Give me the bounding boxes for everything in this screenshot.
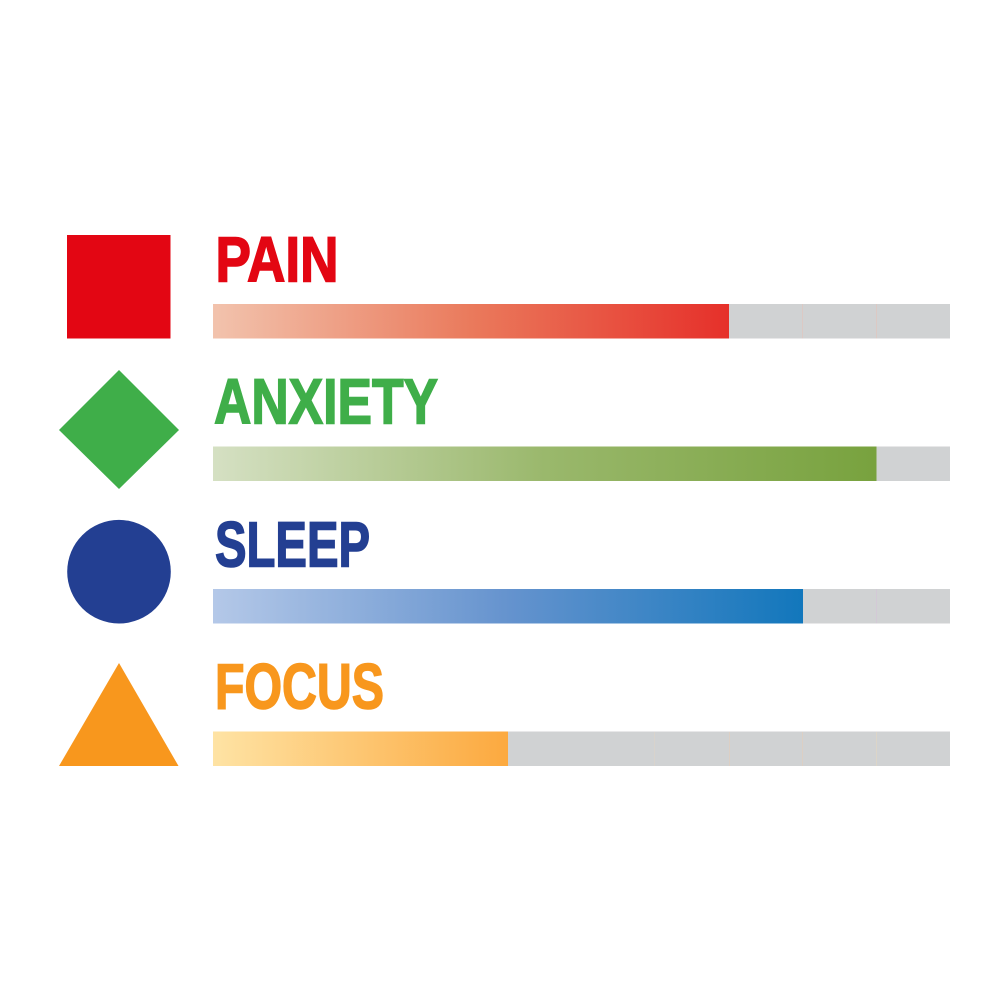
row: focus bbox=[59, 650, 950, 766]
icon: blue circle bbox=[67, 520, 171, 624]
bar: anxiety bbox=[213, 446, 950, 481]
heading: anxiety: ANXIETY bbox=[214, 366, 438, 438]
bar: focus bbox=[213, 732, 950, 766]
icon: orange triangle bbox=[59, 663, 178, 766]
heading: sleep: SLEEP bbox=[215, 508, 370, 580]
icon: green diamond bbox=[59, 370, 179, 489]
heading: focus: FOCUS bbox=[215, 650, 384, 722]
row: pain bbox=[67, 224, 950, 338]
bar: sleep bbox=[213, 589, 950, 624]
heading: pain: PAIN bbox=[216, 224, 338, 296]
row: sleep bbox=[67, 508, 950, 624]
bar: pain bbox=[213, 304, 950, 338]
row: anxiety bbox=[59, 366, 950, 489]
icon: red square bbox=[67, 235, 170, 338]
